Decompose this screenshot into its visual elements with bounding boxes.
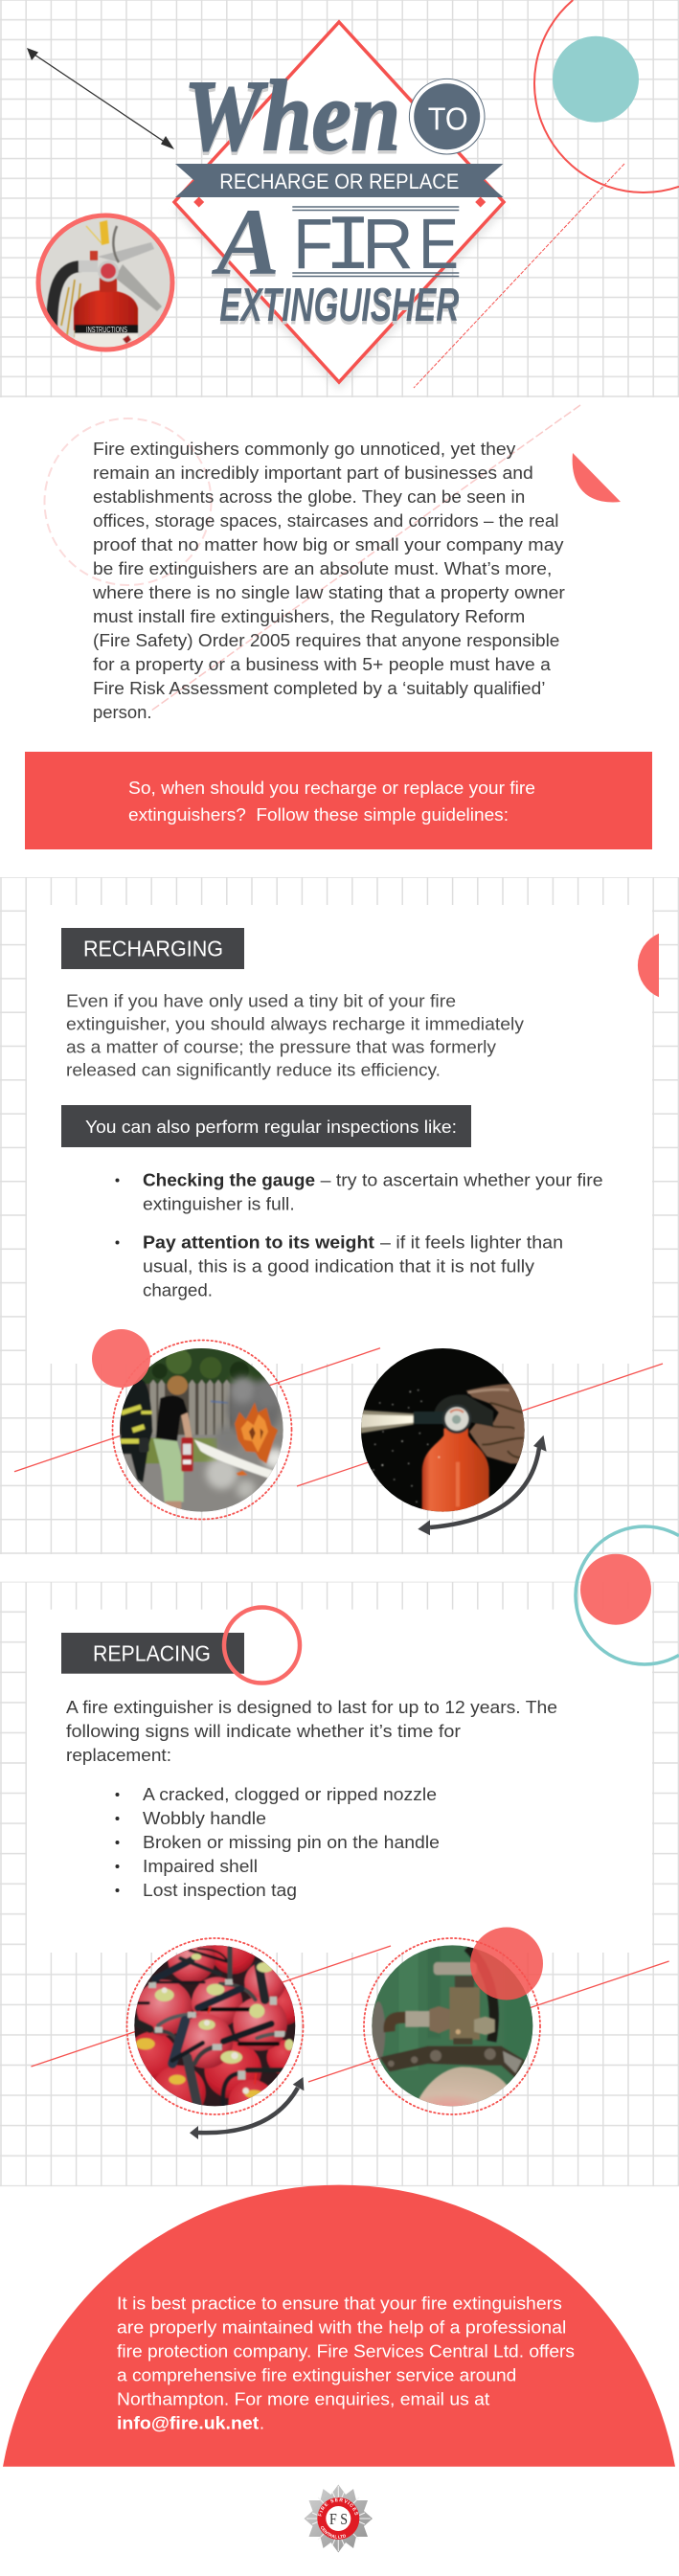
recharging paragraph: released can significantly reduce its efficiency. (66, 1061, 441, 1080)
intro paragraph: Fire extinguishers commonly go unnoticed, yet they (93, 440, 515, 459)
recharging paragraph: extinguisher, you should always recharge it immediately (66, 1015, 524, 1034)
header grid background (0, 0, 679, 397)
title: When: When (184, 63, 400, 174)
replacement signs list: Lost inspection tag (143, 1881, 297, 1900)
closing paragraph (117, 2294, 575, 2433)
recharging section (0, 877, 679, 1554)
intro paragraph: proof that no matter how big or small your company may (93, 535, 563, 554)
title: A: A (211, 192, 280, 298)
inspections list: extinguisher is full. (143, 1194, 295, 1213)
logo: Fire Services Central badge: FIRE SERVICES (318, 2497, 358, 2517)
closing paragraph: are properly maintained with the help of a professional (117, 2318, 566, 2338)
intro paragraph: be fire extinguishers are an absolute must. What’s more, (93, 559, 552, 578)
replacing label (61, 1633, 244, 1674)
closing paragraph: . (260, 2414, 264, 2433)
title: FIRE with rules: E (419, 204, 459, 283)
inspections label (61, 1105, 471, 1147)
replacement signs list (115, 1785, 440, 1900)
dashed pink circle (44, 418, 211, 585)
inspections list: – if it feels lighter than (380, 1232, 563, 1252)
replacing label: REPLACING (93, 1641, 211, 1666)
inspections list: Checking the gauge (143, 1170, 315, 1189)
replacement signs list: Wobbly handle (143, 1809, 266, 1828)
logo: Fire Services Central badge: F S (329, 2510, 348, 2528)
title: FIRE with rules: I (325, 203, 372, 292)
replacing grid background (0, 1582, 679, 2186)
replacing section (0, 1526, 679, 2186)
intro paragraph: Fire Risk Assessment completed by a ‘suitably qualified’ (93, 679, 546, 698)
closing paragraph: info@fire.uk.net (117, 2414, 259, 2433)
intro paragraph: person. (93, 703, 151, 722)
title: EXTINGUISHER: EXTINGUISHER (219, 283, 460, 335)
dashed red diagonal (414, 164, 624, 388)
curved double arrow (190, 2077, 304, 2139)
intro paragraph: for a property or a business with 5+ people must have a (93, 655, 552, 674)
teal ring (576, 1526, 679, 1664)
red dome (3, 2185, 675, 2467)
title: FIRE with rules: R (362, 204, 414, 283)
intro paragraph: (Fire Safety) Order 2005 requires that anyone responsible (93, 631, 559, 650)
red circle accent (92, 1329, 150, 1388)
intro paragraph (92, 440, 565, 722)
decorative red ring (534, 0, 679, 192)
title: When: When (184, 59, 400, 171)
dotted ring around photo (113, 1341, 291, 1519)
photo: woman using extinguisher on fire (118, 1345, 287, 1518)
intro paragraph: establishments across the globe. They can be seen in (93, 487, 525, 507)
inspections list: Pay attention to its weight (143, 1232, 374, 1252)
replacing paragraph (66, 1698, 557, 1765)
inspections label: You can also perform regular inspections like: (85, 1118, 457, 1137)
title: FIRE with rules (292, 203, 459, 292)
recharging paragraph (66, 992, 524, 1080)
red ring accent (224, 1607, 300, 1683)
intro paragraph: remain an incredibly important part of businesses and (93, 463, 533, 483)
ribbon: recharge or replace (175, 164, 504, 197)
recharging white panel (27, 905, 652, 1364)
photo: group of extinguishers (134, 1945, 295, 2107)
inspections list: usual, this is a good indication that it is not fully (143, 1256, 534, 1276)
guidelines banner (25, 752, 652, 849)
double-headed arrow (27, 48, 174, 149)
replacement signs list: A cracked, clogged or ripped nozzle (143, 1785, 437, 1804)
replacement signs list: Impaired shell (143, 1857, 258, 1876)
red diagonal lines (31, 1946, 669, 2082)
recharging grid background (0, 877, 679, 1554)
photo: extinguisher close-up (38, 215, 172, 352)
title: FIRE with rules: F (293, 204, 333, 283)
recharging label (61, 928, 244, 969)
inspections list: – try to ascertain whether your fire (321, 1170, 603, 1189)
inspections list (115, 1170, 603, 1299)
replacing paragraph: replacement: (66, 1746, 171, 1765)
TO badge: TO (428, 102, 468, 136)
closing paragraph: fire protection company. Fire Services Central Ltd. offers (117, 2342, 575, 2361)
intro section (25, 405, 652, 849)
logo: Fire Services Central badge: CENTRAL LTD (320, 2526, 346, 2539)
curved double arrow (418, 1435, 547, 1535)
header section (0, 0, 679, 397)
guidelines banner: extinguishers? Follow these simple guidelines: (128, 805, 509, 825)
replacing paragraph: A fire extinguisher is designed to last for up to 12 years. The (66, 1698, 557, 1717)
replacement signs list: Broken or missing pin on the handle (143, 1833, 440, 1852)
closing paragraph: Northampton. For more enquiries, email us at (117, 2390, 489, 2409)
red diagonal lines (14, 1348, 663, 1486)
TO badge (409, 79, 485, 154)
photo: extinguisher close-up: INSTRUCTIONS (86, 326, 127, 334)
logo: Fire Services Central badge (305, 2484, 373, 2553)
replacing paragraph: following signs will indicate whether it’s time for (66, 1722, 461, 1741)
dotted ring around photo (126, 1938, 303, 2114)
title: EXTINGUISHER: EXTINGUISHER (219, 280, 460, 331)
closing section (3, 2185, 675, 2553)
recharging label: RECHARGING (83, 937, 223, 961)
red circle segment (573, 453, 621, 502)
inspections list: charged. (143, 1280, 213, 1299)
dotted ring around photo (364, 1938, 540, 2114)
red circle accent (580, 1554, 651, 1625)
photo: extinguisher discharging (359, 1348, 529, 1518)
teal circle (553, 36, 639, 123)
small diamonds (193, 197, 486, 207)
photo: corroded valve (372, 1942, 533, 2112)
guidelines banner: So, when should you recharge or replace your fire (128, 779, 535, 798)
red circle accent (470, 1927, 543, 2000)
title diamond (174, 22, 505, 391)
recharging paragraph: as a matter of course; the pressure that was formerly (66, 1038, 496, 1057)
title: A: A (211, 189, 280, 295)
ribbon: recharge or replace: RECHARGE OR REPLACE (219, 169, 459, 193)
closing paragraph: a comprehensive fire extinguisher service around (117, 2366, 516, 2385)
replacing white panel (27, 1610, 652, 1953)
title: EXTINGUISHER (219, 280, 460, 335)
red half circle (638, 934, 659, 997)
closing paragraph: It is best practice to ensure that your fire extinguishers (117, 2294, 562, 2314)
intro paragraph: offices, storage spaces, staircases and corridors – the real (93, 511, 559, 531)
intro paragraph: where there is no single law stating that a property owner (92, 583, 565, 602)
dashed pink diagonal (151, 405, 580, 711)
recharging paragraph: Even if you have only used a tiny bit of your fire (66, 992, 456, 1011)
intro paragraph: must install fire extinguishers, the Regulatory Reform (93, 607, 525, 626)
